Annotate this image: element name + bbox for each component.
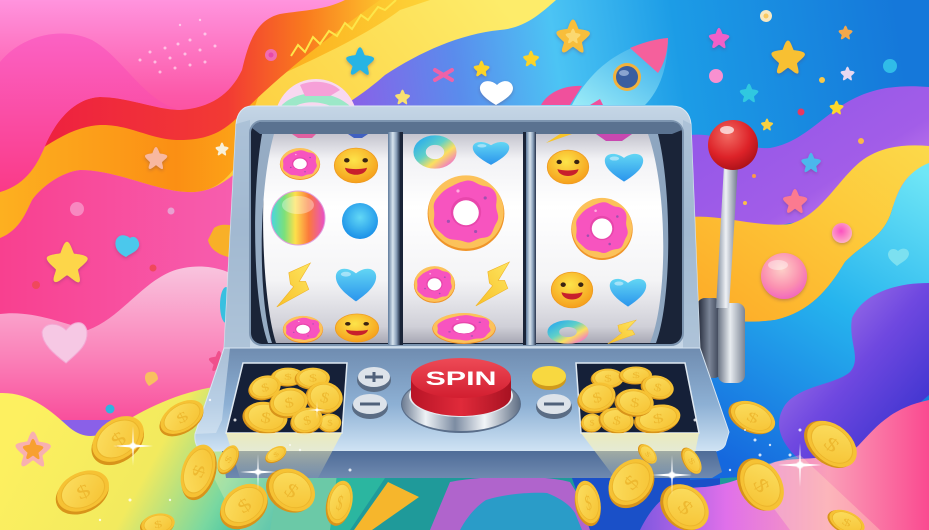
- wave: top pink: [0, 0, 345, 192]
- wave: right yellow: [690, 145, 929, 322]
- reel window: [250, 121, 683, 345]
- coin tray right: [574, 363, 699, 437]
- spin button: [401, 358, 521, 433]
- slot machine: [195, 106, 758, 478]
- wave: left pink region: [0, 165, 245, 420]
- decoration: glitter: [99, 399, 802, 521]
- decoration: dots top left: [138, 19, 216, 74]
- icon: rainbow ball behind machine: [275, 79, 357, 161]
- beam: left light: [200, 450, 340, 530]
- button plus: [357, 367, 391, 392]
- front panel: [195, 348, 729, 478]
- wave: yellow to green: [0, 385, 360, 530]
- lever knob: [708, 120, 758, 170]
- wave: orange band: [0, 0, 430, 238]
- orb: pink large: [761, 253, 807, 299]
- decorations: left side: [16, 143, 236, 467]
- lever arm: [716, 165, 738, 308]
- icon: squiggle: [291, 0, 396, 56]
- falling coins: [48, 393, 868, 530]
- decorations: stars and dots top center: [265, 19, 590, 104]
- orb: magenta: [832, 223, 852, 243]
- label: SPIN: SPIN: [426, 369, 496, 390]
- wave: right cyan: [690, 163, 929, 480]
- coin tray left: [226, 363, 347, 438]
- reel dividers: [255, 132, 668, 345]
- icon: cyan heart: [888, 249, 909, 266]
- beam: right light: [745, 455, 880, 530]
- lever base: [697, 298, 745, 383]
- button minus right: [536, 394, 572, 419]
- machine frame: [224, 106, 700, 350]
- icon: white heart: [480, 81, 513, 105]
- sparkles: [113, 401, 822, 495]
- button minus left: [352, 394, 388, 419]
- glow beams: [226, 433, 342, 478]
- icon: rocket: [541, 38, 668, 105]
- wave: right purple: [779, 283, 929, 462]
- button yellow: [532, 366, 566, 390]
- decorations: top right stars: [709, 10, 897, 213]
- reel 3: [535, 134, 664, 344]
- wave: red band: [0, 0, 380, 150]
- wave: bottom middle: [300, 460, 740, 530]
- reel 1: [263, 134, 390, 343]
- wave: bottom-right pink: [640, 400, 929, 530]
- wave: yellow band: [0, 0, 556, 320]
- wave: right purple top: [690, 86, 929, 240]
- wave: pale pink: [0, 267, 245, 420]
- reel 2: [402, 134, 525, 344]
